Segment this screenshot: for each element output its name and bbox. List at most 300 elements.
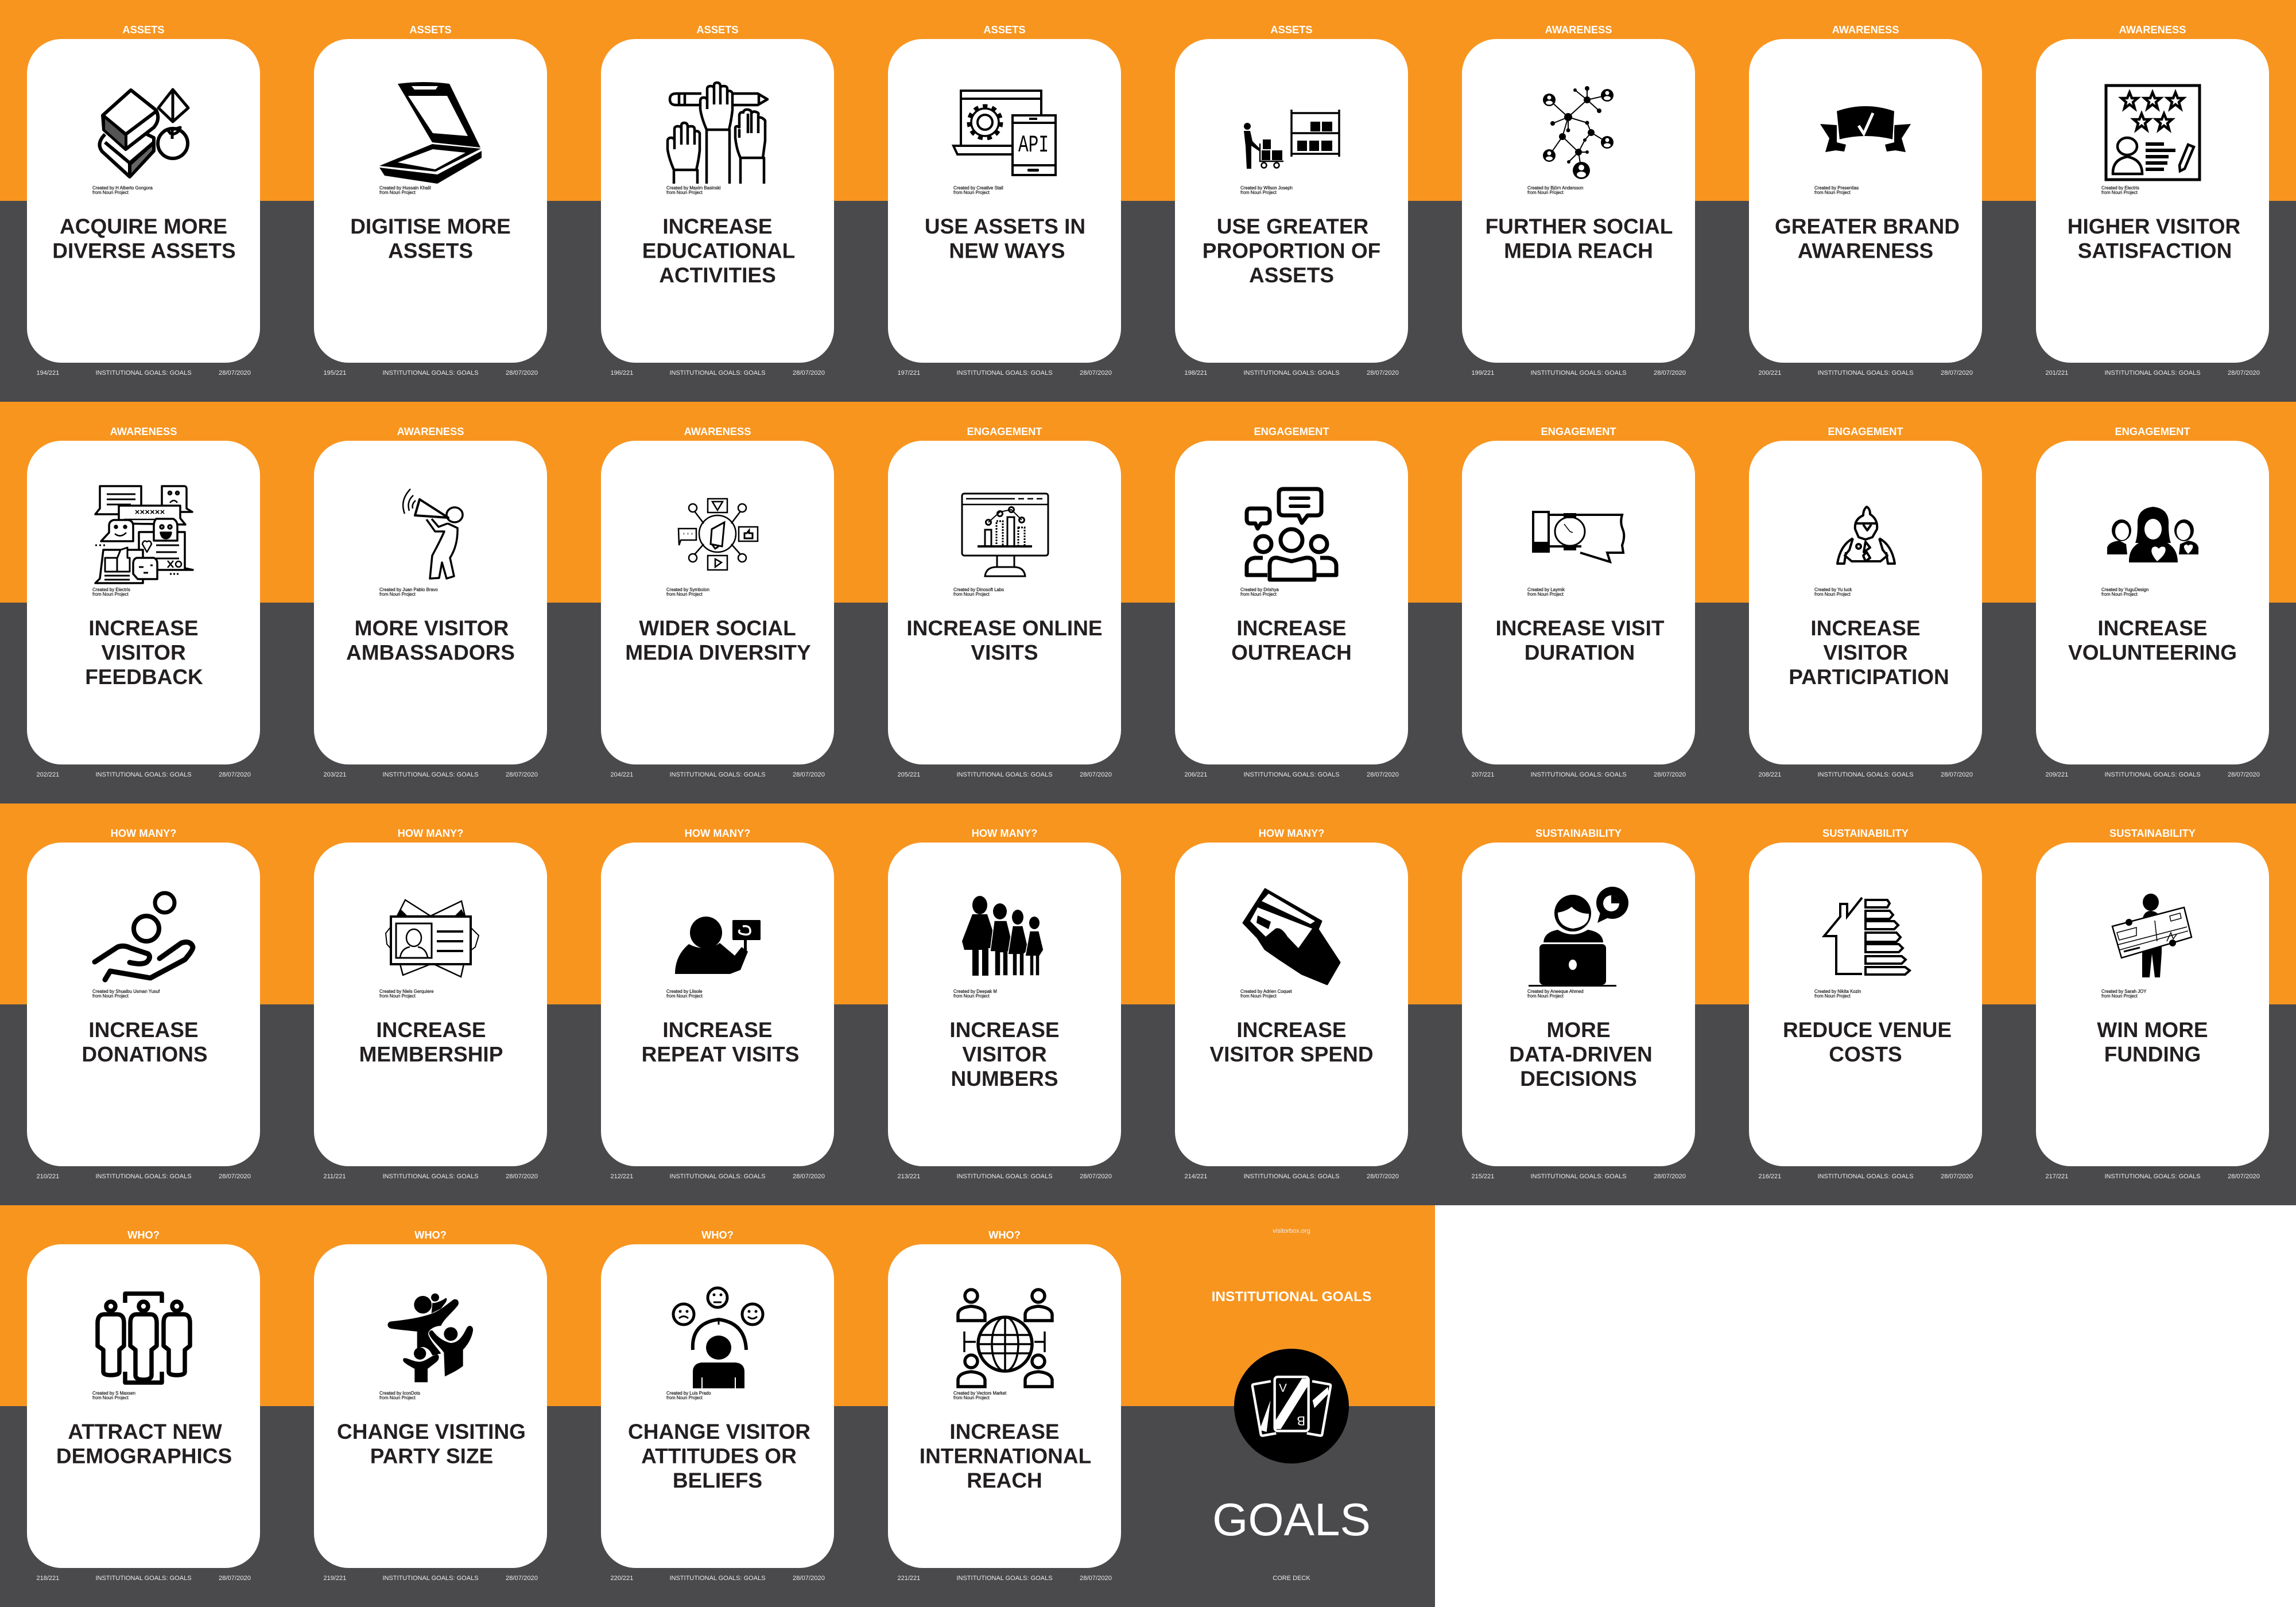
goal title: DATA-DRIVEN (1509, 1042, 1653, 1066)
deck label: INSTITUTIONAL GOALS: GOALS (1817, 1173, 1914, 1180)
credit: from Noun Project (1240, 592, 1277, 597)
deck label: INSTITUTIONAL GOALS: GOALS (95, 771, 192, 778)
icon: social media hub (678, 499, 758, 570)
deck label: INSTITUTIONAL GOALS: GOALS (1243, 771, 1340, 778)
page number: 211/221 (324, 1173, 346, 1180)
page number: 206/221 (1185, 771, 1207, 778)
card panel (1462, 39, 1695, 363)
category: ENGAGEMENT (1254, 425, 1329, 437)
date: 28/07/2020 (2228, 1173, 2260, 1180)
date: 28/07/2020 (1080, 771, 1112, 778)
goal title: PARTICIPATION (1789, 665, 1949, 689)
icon: feedback chat bubbles: ×××××× (135, 507, 165, 517)
page number: 205/221 (898, 771, 920, 778)
goal title: MEDIA REACH (1504, 239, 1653, 263)
goal title: VISITS (971, 641, 1038, 665)
goal title: ACTIVITIES (659, 263, 776, 287)
icon: person holding cheque (2112, 894, 2192, 977)
card panel (2036, 843, 2269, 1166)
page number: 198/221 (1185, 370, 1207, 376)
card: increase international reach (888, 1229, 1121, 1582)
credit: from Noun Project (953, 993, 990, 999)
goal title: FEEDBACK (85, 665, 203, 689)
goal title: ATTRACT NEW (68, 1420, 222, 1443)
credit: from Noun Project (1814, 993, 1851, 999)
card panel (888, 39, 1121, 363)
credit: from Noun Project (92, 993, 129, 999)
category: WHO? (988, 1229, 1021, 1241)
goal title: DONATIONS (82, 1042, 208, 1066)
credit: from Noun Project (379, 190, 416, 195)
icon: laptop gear and phone API: API (1018, 131, 1049, 159)
goal title: INCREASE (376, 1018, 486, 1042)
category: HOW MANY? (685, 827, 750, 839)
goal title: WIN MORE (2097, 1018, 2208, 1042)
date: 28/07/2020 (1941, 771, 1973, 778)
credit: Created by Niels Gerquiere (379, 989, 433, 994)
goal title: WIDER SOCIAL (639, 616, 796, 640)
deck label: INSTITUTIONAL GOALS: GOALS (956, 370, 1053, 376)
icon: monitor with bar chart (962, 494, 1048, 576)
goal title: INCREASE ONLINE (906, 616, 1103, 640)
website: visitorbox.org (1273, 1228, 1310, 1235)
goal title: VISITOR (1823, 641, 1908, 665)
date: 28/07/2020 (1080, 1173, 1112, 1180)
card panel (1175, 39, 1408, 363)
credit: from Noun Project (1240, 993, 1277, 999)
icon: mood gauge above person (673, 1288, 763, 1388)
page number: 217/221 (2046, 1173, 2068, 1180)
deck label: INSTITUTIONAL GOALS: GOALS (956, 1575, 1053, 1582)
credit: from Noun Project (2101, 993, 2138, 999)
credit: from Noun Project (1814, 190, 1851, 195)
deck label: INSTITUTIONAL GOALS: GOALS (669, 370, 766, 376)
card panel (1749, 441, 1982, 764)
icon: laptop gear and phone API (953, 91, 1056, 175)
deck label: INSTITUTIONAL GOALS: GOALS (2104, 1173, 2201, 1180)
credit: Created by Nikita Kozin (1814, 989, 1861, 994)
goal title: INTERNATIONAL (920, 1444, 1091, 1468)
card panel (314, 441, 547, 764)
date: 28/07/2020 (793, 370, 825, 376)
goal title: SATISFACTION (2078, 239, 2232, 263)
goal title: AMBASSADORS (346, 641, 515, 665)
page number: 221/221 (898, 1575, 920, 1582)
deck label: INSTITUTIONAL GOALS: GOALS (382, 370, 479, 376)
goal title: CHANGE VISITOR (628, 1420, 810, 1443)
date: 28/07/2020 (2228, 370, 2260, 376)
date: 28/07/2020 (219, 771, 251, 778)
credit: Created by Shuaibu Usman Yusuf (92, 989, 160, 994)
date: 28/07/2020 (1941, 1173, 1973, 1180)
card panel (1175, 843, 1408, 1166)
category: ASSETS (696, 24, 739, 36)
category: ENGAGEMENT (1828, 425, 1903, 437)
credit: from Noun Project (953, 592, 990, 597)
deck label: INSTITUTIONAL GOALS: GOALS (1817, 771, 1914, 778)
card: increase visitor participation (1749, 425, 1982, 778)
goal title: DIGITISE MORE (350, 215, 511, 238)
goal title: EDUCATIONAL (642, 239, 795, 263)
credit: from Noun Project (953, 190, 990, 195)
credit: Created by Maxim Basinski (666, 185, 720, 191)
deck label: INSTITUTIONAL GOALS: GOALS (1530, 370, 1627, 376)
deck title: INSTITUTIONAL GOALS (1212, 1289, 1371, 1305)
credit: from Noun Project (1240, 190, 1277, 195)
card: increase membership (314, 827, 547, 1180)
goal title: HIGHER VISITOR (2068, 215, 2240, 238)
goal title: DURATION (1525, 641, 1635, 665)
goal title: PARTY SIZE (370, 1444, 493, 1468)
credit: Created by Sarah JOY (2101, 989, 2146, 994)
category: AWARENESS (110, 425, 177, 437)
category: ASSETS (1270, 24, 1313, 36)
goal title: BELIEFS (673, 1469, 762, 1492)
goal title: PROPORTION OF (1203, 239, 1380, 263)
card: increase outreach (1175, 425, 1408, 778)
goal title: INCREASE (949, 1420, 1060, 1443)
category: WHO? (701, 1229, 734, 1241)
date: 28/07/2020 (1941, 370, 1973, 376)
card: digitise more assets (314, 24, 547, 376)
card panel (888, 843, 1121, 1166)
credit: from Noun Project (379, 993, 416, 999)
card: use assets in new ways (888, 24, 1121, 376)
goal title: REPEAT VISITS (642, 1042, 799, 1066)
card panel (2036, 441, 2269, 764)
goal title: INCREASE (662, 1018, 773, 1042)
icon: raised hands and pencil (668, 83, 767, 184)
date: 28/07/2020 (793, 1575, 825, 1582)
deck label: INSTITUTIONAL GOALS: GOALS (669, 771, 766, 778)
credit: Created by Björn Andersson (1527, 185, 1584, 191)
deck label: INSTITUTIONAL GOALS: GOALS (956, 1173, 1053, 1180)
page number: 215/221 (1472, 1173, 1494, 1180)
goal title: REACH (967, 1469, 1042, 1492)
deck label: INSTITUTIONAL GOALS: GOALS (1530, 771, 1627, 778)
category: ENGAGEMENT (1541, 425, 1616, 437)
credit: Created by Llisole (666, 989, 702, 994)
icon: people with speech bubbles (1247, 489, 1336, 580)
card panel (27, 39, 260, 363)
icon: people around globe (958, 1290, 1052, 1387)
goal title: VOLUNTEERING (2068, 641, 2237, 665)
credit: Created by Electris (92, 587, 130, 592)
date: 28/07/2020 (219, 370, 251, 376)
date: 28/07/2020 (219, 1173, 251, 1180)
date: 28/07/2020 (506, 370, 538, 376)
date: 28/07/2020 (1654, 1173, 1686, 1180)
goal title: COSTS (1829, 1042, 1902, 1066)
credit: Created by Yu luck (1814, 587, 1852, 592)
credit: Created by Juan Pablo Bravo (379, 587, 438, 592)
icon: three people with hearts (2107, 507, 2198, 562)
credit: Created by YuguDesign (2101, 587, 2148, 592)
deck label: INSTITUTIONAL GOALS: GOALS (2104, 370, 2201, 376)
card panel (601, 1244, 834, 1568)
card: increase educational activities (601, 24, 834, 376)
deck label: INSTITUTIONAL GOALS: GOALS (1243, 1173, 1340, 1180)
goal title: CHANGE VISITING (337, 1420, 526, 1443)
card panel (1462, 843, 1695, 1166)
page number: 220/221 (611, 1575, 633, 1582)
card panel (1462, 441, 1695, 764)
deck label: INSTITUTIONAL GOALS: GOALS (1243, 370, 1340, 376)
deck label: INSTITUTIONAL GOALS: GOALS (669, 1575, 766, 1582)
credit: from Noun Project (666, 592, 703, 597)
credit: from Noun Project (2101, 190, 2138, 195)
icon: ribbon banner with check (1820, 106, 1911, 152)
credit: Created by Vectors Market (953, 1391, 1006, 1396)
card: wider social media diversity (601, 425, 834, 778)
category: AWARENESS (2119, 24, 2186, 36)
goal title: INCREASE (88, 1018, 199, 1042)
page number: 201/221 (2046, 370, 2068, 376)
category: ASSETS (409, 24, 452, 36)
icon: wrist with watch (1533, 512, 1624, 562)
category: WHO? (414, 1229, 447, 1241)
credit: from Noun Project (2101, 592, 2138, 597)
page number: 210/221 (37, 1173, 59, 1180)
date: 28/07/2020 (1367, 1173, 1399, 1180)
credit: from Noun Project (666, 1395, 703, 1400)
deck label: INSTITUTIONAL GOALS: GOALS (382, 1575, 479, 1582)
category: ASSETS (122, 24, 165, 36)
goal title: DIVERSE ASSETS (52, 239, 236, 263)
deck label: INSTITUTIONAL GOALS: GOALS (1817, 370, 1914, 376)
deck label: INSTITUTIONAL GOALS: GOALS (956, 771, 1053, 778)
deck label: INSTITUTIONAL GOALS: GOALS (1530, 1173, 1627, 1180)
category: WHO? (127, 1229, 160, 1241)
credit: Created by Hussain Khalil (379, 185, 431, 191)
card: increase visitor numbers (888, 827, 1121, 1180)
goal title: NUMBERS (951, 1067, 1058, 1090)
icon: rating form (2106, 86, 2200, 180)
card: increase online visits (888, 425, 1121, 778)
goal title: INCREASE (662, 215, 773, 238)
category: AWARENESS (397, 425, 464, 437)
goal title: INCREASE (1236, 1018, 1347, 1042)
page number: 212/221 (611, 1173, 633, 1180)
goal title: INCREASE (88, 616, 199, 640)
deck label: INSTITUTIONAL GOALS: GOALS (669, 1173, 766, 1180)
date: 28/07/2020 (2228, 771, 2260, 778)
category: SUSTAINABILITY (1822, 827, 1909, 839)
card: acquire more diverse assets (27, 24, 260, 376)
credit: Created by Wilson Joseph (1240, 185, 1293, 191)
card panel (888, 1244, 1121, 1568)
icon: social network graph (1543, 86, 1614, 179)
goal title: NEW WAYS (949, 239, 1065, 263)
goal title: USE GREATER (1217, 215, 1368, 238)
page number: 204/221 (611, 771, 633, 778)
goal title: INCREASE (949, 1018, 1060, 1042)
credit: Created by Luis Prado (666, 1391, 711, 1396)
date: 28/07/2020 (1080, 1575, 1112, 1582)
card: reduce venue costs (1749, 827, 1982, 1180)
card: increase volunteering (2036, 425, 2269, 778)
goal title: GREATER BRAND (1775, 215, 1960, 238)
category: HOW MANY? (972, 827, 1037, 839)
date: 28/07/2020 (506, 1173, 538, 1180)
date: 28/07/2020 (1367, 771, 1399, 778)
goal title: ATTITUDES OR (641, 1444, 797, 1468)
deck label: INSTITUTIONAL GOALS: GOALS (95, 1173, 192, 1180)
page number: 207/221 (1472, 771, 1494, 778)
card: increase visit duration (1462, 425, 1695, 778)
card: more visitor ambassadors (314, 425, 547, 778)
card panel (1175, 441, 1408, 764)
goal title: FURTHER SOCIAL (1486, 215, 1673, 238)
date: 28/07/2020 (506, 1575, 538, 1582)
card panel (27, 1244, 260, 1568)
card: increase visitor feedback (27, 425, 260, 778)
page number: 203/221 (324, 771, 346, 778)
icon: scanner (379, 82, 482, 184)
page number: 195/221 (324, 370, 346, 376)
date: 28/07/2020 (793, 771, 825, 778)
card: increase donations (27, 827, 260, 1180)
goal title: MORE VISITOR (355, 616, 509, 640)
credit: Created by IconDots (379, 1391, 420, 1396)
goal title: DEMOGRAPHICS (56, 1444, 232, 1468)
credit: from Noun Project (666, 190, 703, 195)
credit: from Noun Project (92, 592, 129, 597)
card: increase visitor spend (1175, 827, 1408, 1180)
card panel (888, 441, 1121, 764)
icon: credit card in hand (1243, 889, 1340, 984)
category: SUSTAINABILITY (2109, 827, 2196, 839)
page number: 209/221 (2046, 771, 2068, 778)
icon: house with rating bars (1824, 898, 1910, 975)
category: AWARENESS (684, 425, 751, 437)
credit: Created by Creative Stall (953, 185, 1003, 191)
credit: Created by Laymik (1527, 587, 1565, 592)
page number: 219/221 (324, 1575, 346, 1582)
icon: person with cart and shelves (1244, 110, 1339, 169)
goal title: VISITOR (101, 641, 186, 665)
card panel (601, 843, 834, 1166)
page number: 200/221 (1759, 370, 1781, 376)
icon: person with megaphone (403, 489, 463, 579)
card: change visiting party size (314, 1229, 547, 1582)
date: 28/07/2020 (1080, 370, 1112, 376)
card: greater brand awareness (1749, 24, 1982, 376)
credit: from Noun Project (92, 190, 129, 195)
credit: Created by S Maxsen (92, 1391, 135, 1396)
date: 28/07/2020 (1654, 771, 1686, 778)
card panel (314, 39, 547, 363)
credit: Created by Symbolon (666, 587, 709, 592)
icon: family playing (387, 1294, 473, 1382)
goal title: USE ASSETS IN (925, 215, 1085, 238)
card panel (601, 39, 834, 363)
goal title: VISITOR (962, 1042, 1047, 1066)
goal title: ASSETS (388, 239, 473, 263)
card: further social media reach (1462, 24, 1695, 376)
goal title: AWARENESS (1798, 239, 1933, 263)
page number: 199/221 (1472, 370, 1494, 376)
goal title: INCREASE VISIT (1496, 616, 1665, 640)
deck label: INSTITUTIONAL GOALS: GOALS (382, 1173, 479, 1180)
credit: from Noun Project (1527, 993, 1564, 999)
icon: people in frame (98, 1294, 190, 1383)
card panel (27, 441, 260, 764)
icon: membership card (386, 900, 479, 977)
credit: from Noun Project (953, 1395, 990, 1400)
category: SUSTAINABILITY (1535, 827, 1622, 839)
card: win more funding (2036, 827, 2269, 1180)
credit: Created by Electris (2101, 185, 2139, 191)
icon: feedback chat bubbles (95, 486, 193, 583)
goal title: MEDIA DIVERSITY (625, 641, 811, 665)
page number: 216/221 (1759, 1173, 1781, 1180)
deck name: CORE DECK (1273, 1575, 1310, 1582)
category: ENGAGEMENT (967, 425, 1042, 437)
icon: figure holding shapes (1837, 507, 1895, 564)
goal title: INCREASE (1810, 616, 1921, 640)
goal title: ASSETS (1249, 263, 1334, 287)
card panel (1749, 843, 1982, 1166)
credit: from Noun Project (379, 1395, 416, 1400)
card panel (2036, 39, 2269, 363)
icon: fanned cards in black circle: V (1279, 1381, 1287, 1395)
goal title: REDUCE VENUE (1783, 1018, 1952, 1042)
goal title: DECISIONS (1520, 1067, 1637, 1090)
date: 28/07/2020 (219, 1575, 251, 1582)
date: 28/07/2020 (1654, 370, 1686, 376)
card panel (27, 843, 260, 1166)
card panel (1749, 39, 1982, 363)
card: higher visitor satisfaction (2036, 24, 2269, 376)
credit: Created by Dinosoft Labs (953, 587, 1004, 592)
card: more data-driven decisions (1462, 827, 1695, 1180)
card panel (601, 441, 834, 764)
cover word: GOALS (1212, 1494, 1371, 1545)
date: 28/07/2020 (1367, 370, 1399, 376)
card panel (314, 1244, 547, 1568)
page number: 214/221 (1185, 1173, 1207, 1180)
deck label: INSTITUTIONAL GOALS: GOALS (95, 1575, 192, 1582)
goal title: MEMBERSHIP (359, 1042, 503, 1066)
credit: from Noun Project (1527, 592, 1564, 597)
page number: 213/221 (898, 1173, 920, 1180)
credit: from Noun Project (379, 592, 416, 597)
icon: fanned cards in black circle (1234, 1349, 1349, 1464)
card panel (314, 843, 547, 1166)
cover card (1212, 1228, 1371, 1582)
card: change visitor attitudes or beliefs (601, 1229, 834, 1582)
icon: family group (962, 896, 1044, 976)
credit: from Noun Project (1814, 592, 1851, 597)
category: AWARENESS (1832, 24, 1899, 36)
credit: Created by Aneeque Ahmed (1527, 989, 1584, 994)
icon: fanned cards in black circle: B (1297, 1414, 1305, 1428)
credit: Created by Drishya (1240, 587, 1279, 592)
goal title: OUTREACH (1231, 641, 1352, 665)
goal title: INCREASE (1236, 616, 1347, 640)
category: HOW MANY? (398, 827, 463, 839)
credit: Created by Presentias (1814, 185, 1859, 191)
deck label: INSTITUTIONAL GOALS: GOALS (95, 370, 192, 376)
card: use greater proportion of assets (1175, 24, 1408, 376)
card: increase repeat visits (601, 827, 834, 1180)
icon: person at laptop with chart bubble (1529, 887, 1628, 987)
icon: person holding sign (675, 917, 761, 974)
goal title: INCREASE (2097, 616, 2208, 640)
deck label: INSTITUTIONAL GOALS: GOALS (2104, 771, 2201, 778)
page number: 218/221 (37, 1575, 59, 1582)
